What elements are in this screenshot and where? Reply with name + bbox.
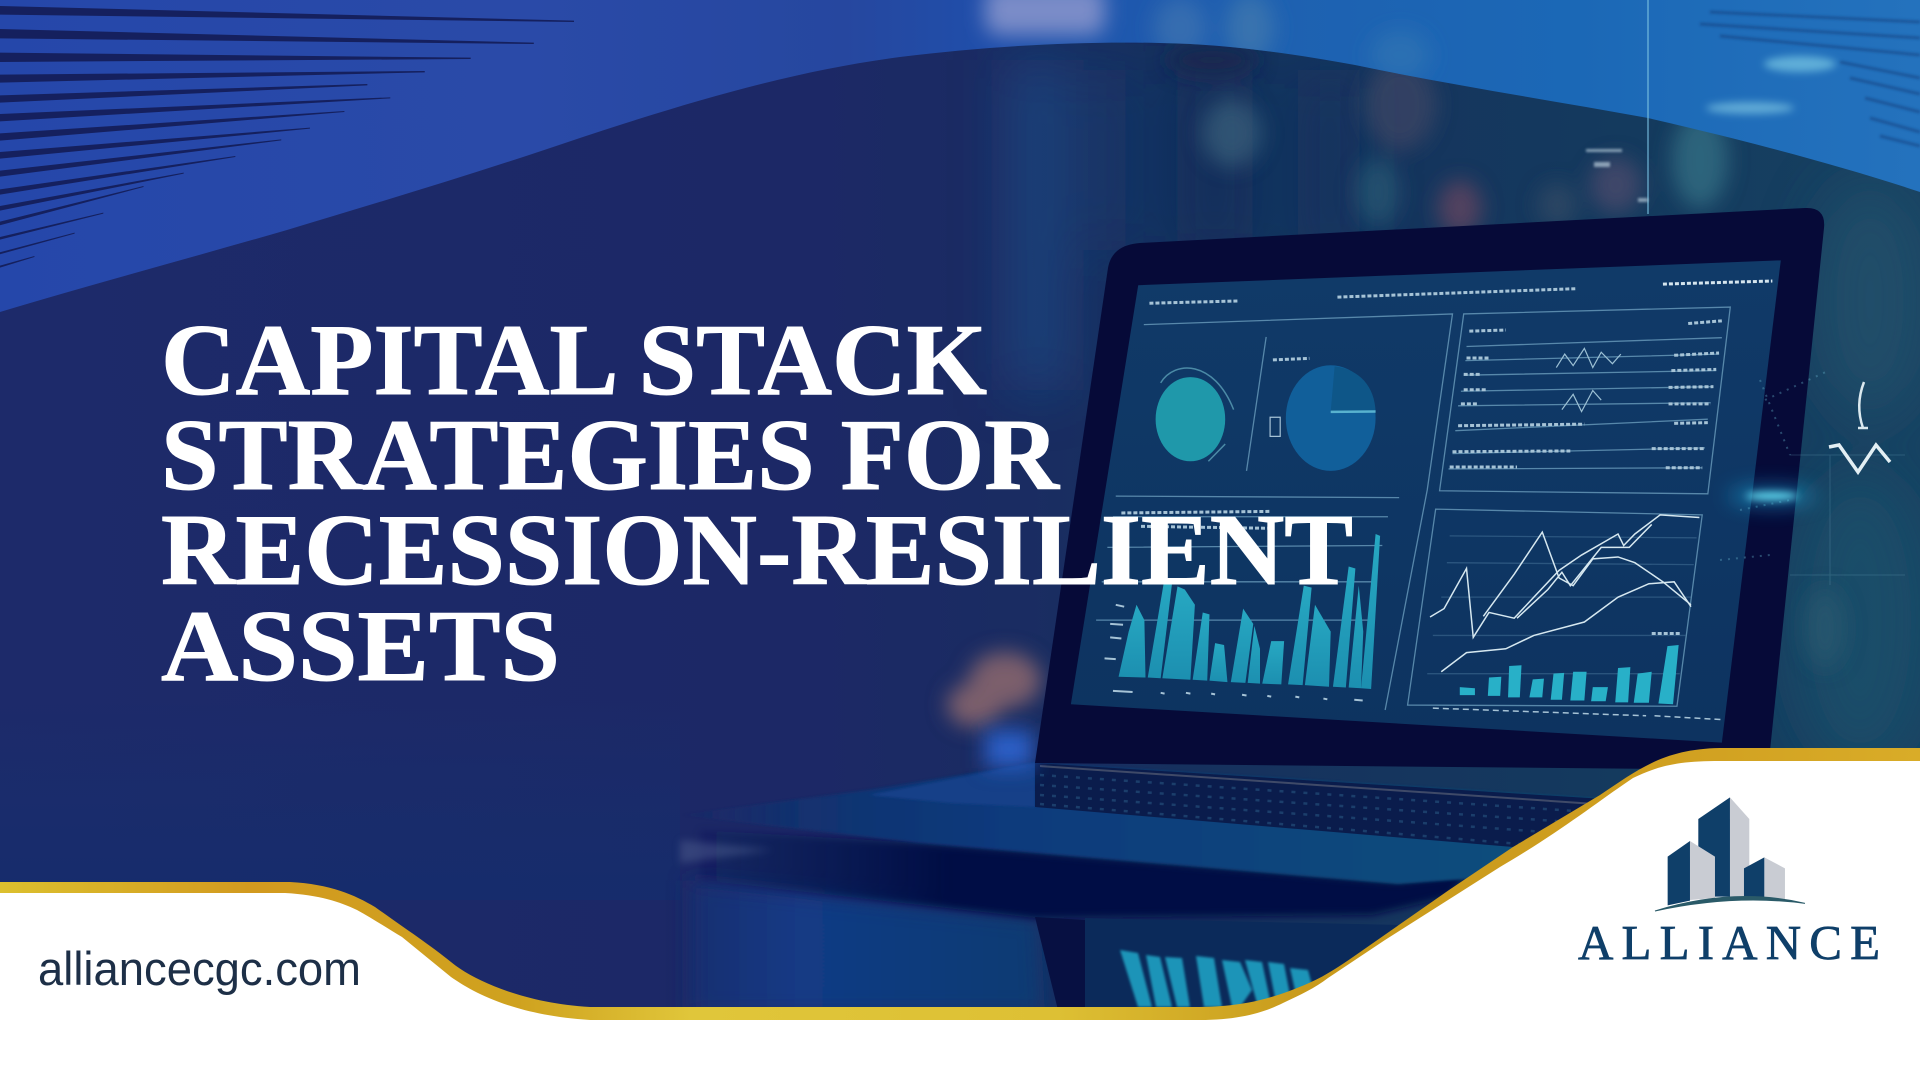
white footer area bbox=[0, 761, 1920, 1080]
logo bbox=[1578, 797, 1880, 970]
bokeh: orange light bbox=[947, 652, 1041, 727]
title: CAPITAL STACK bbox=[161, 304, 987, 417]
website url: alliancecgc.com bbox=[38, 942, 361, 995]
title: RECESSION-RESILIENT bbox=[161, 494, 1353, 607]
desk and laptop base bbox=[680, 730, 1620, 1015]
screen header labels bbox=[1121, 281, 1772, 633]
sparkline glyphs bbox=[1556, 348, 1621, 412]
title bbox=[161, 304, 1353, 703]
laptop bbox=[1035, 208, 1824, 770]
gold wave footer border bbox=[0, 748, 1920, 1080]
laptop lid bezel bbox=[1035, 208, 1824, 770]
small device icon bbox=[1270, 417, 1280, 436]
dashboard screen bbox=[1071, 260, 1781, 743]
holographic overlay bbox=[1720, 370, 1905, 585]
axis label specks bbox=[1105, 605, 1363, 700]
blue light patch bbox=[985, 730, 1033, 768]
bracket glyph icon bbox=[1858, 382, 1868, 428]
icon: buildings bbox=[1655, 797, 1805, 911]
laptop reflection on desk bbox=[1035, 917, 1400, 1010]
faint reflection bbox=[680, 840, 773, 863]
floating HUD data text specks bbox=[1586, 149, 1648, 202]
panel frames bbox=[1096, 307, 1730, 710]
title: STRATEGIES FOR bbox=[161, 399, 1060, 512]
glowing data specks bbox=[1706, 56, 1836, 114]
title: ASSETS bbox=[161, 590, 560, 703]
striped light rays bbox=[0, 6, 574, 268]
line chart bbox=[1430, 515, 1699, 672]
holographic dots bbox=[1720, 370, 1830, 560]
donut gauge bbox=[1156, 368, 1234, 461]
wave glyph icon bbox=[1829, 445, 1890, 472]
bar chart left bbox=[1119, 534, 1380, 689]
keyboard bbox=[869, 763, 1620, 847]
footer label specks bbox=[1433, 708, 1722, 720]
pie chart bbox=[1286, 365, 1376, 471]
wordmark: ALLIANCE bbox=[1578, 915, 1880, 970]
bar chart right bbox=[1460, 645, 1679, 704]
thin vertical data line bbox=[1647, 0, 1649, 214]
top blue band bbox=[0, 0, 1920, 320]
cyan glow bbox=[1728, 486, 1816, 506]
